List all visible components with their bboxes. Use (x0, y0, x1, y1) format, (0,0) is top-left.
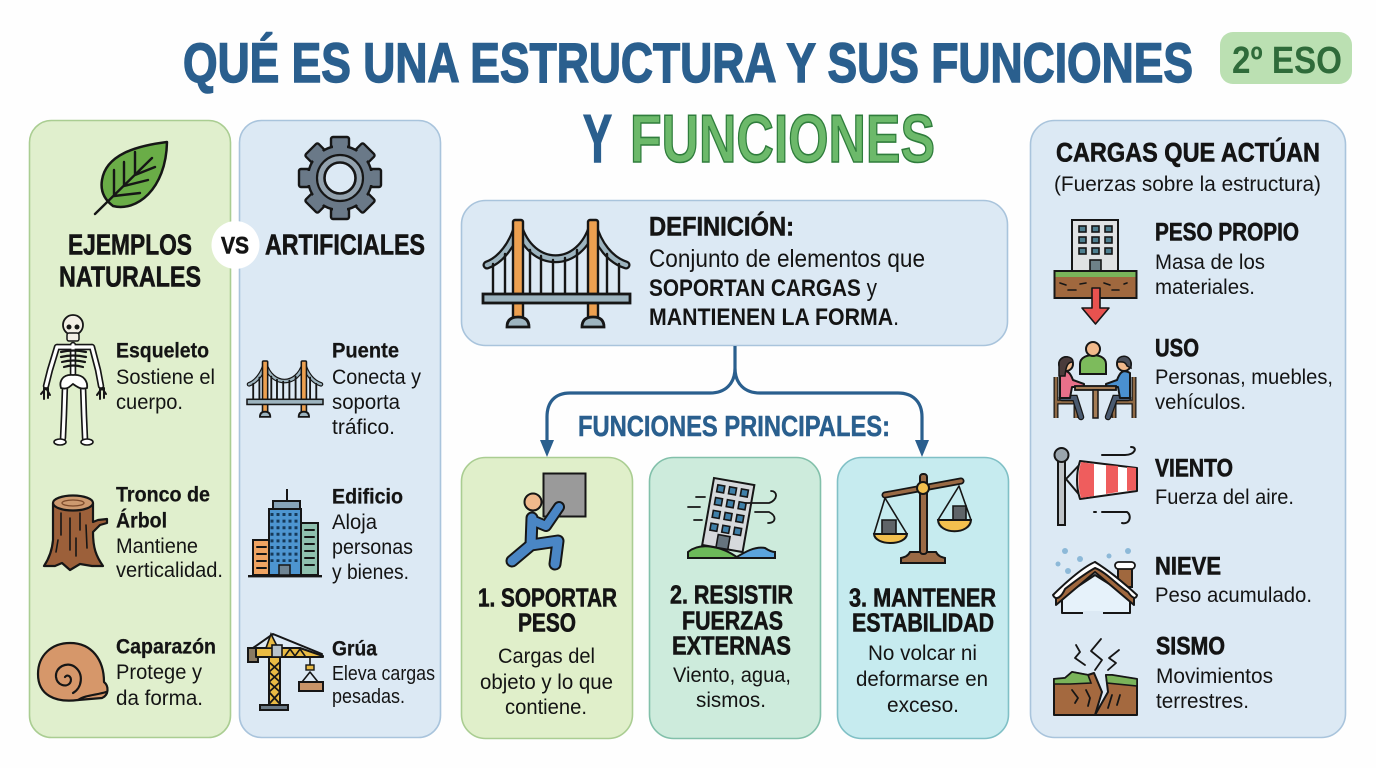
item text: puente (332, 338, 421, 439)
item text: sismo (1156, 632, 1273, 713)
icon: building weight (1054, 220, 1136, 324)
panel: mantener estabilidad (838, 458, 1008, 738)
definition text: Conjunto de elementos que (649, 245, 925, 273)
item text: grúa: pesadas. (332, 686, 405, 708)
item text: puente: Conecta y (332, 365, 421, 389)
card text: No volcar ni (868, 641, 977, 665)
panel: soportar peso (462, 458, 632, 738)
card text: Viento, agua, (673, 663, 791, 687)
item text: peso propio (1155, 218, 1299, 299)
card text: 1. SOPORTAR (478, 582, 617, 612)
item text: edificio (332, 484, 413, 584)
item text: tronco de árbol: Tronco de (116, 482, 210, 506)
item text: uso: USO (1155, 334, 1199, 362)
icon: suspension bridge (483, 220, 630, 327)
card text: objeto y lo que (480, 670, 613, 694)
item text: nieve: NIEVE (1155, 552, 1221, 580)
heading: ejemplos naturales (59, 230, 201, 294)
item text: uso: vehículos. (1155, 390, 1246, 414)
item text: esqueleto: cuerpo. (116, 390, 183, 414)
icon: earthquake (1054, 639, 1137, 715)
definition text: MANTIENEN LA FORMA. (649, 304, 899, 331)
panel: resistir fuerzas (650, 458, 820, 738)
subtitle: y funciones: FUNCIONES (630, 101, 935, 177)
card text: ESTABILIDAD (852, 608, 994, 638)
item text: caparazón: Caparazón (116, 634, 216, 658)
item text: puente: Puente (332, 338, 399, 362)
card text: PESO (518, 608, 576, 638)
icon: people at a table (1056, 342, 1134, 418)
item text: tronco de árbol: Árbol (116, 508, 167, 532)
icon: balance scale (874, 474, 971, 563)
item text: peso propio: materiales. (1155, 275, 1255, 299)
item text: viento: VIENTO (1155, 454, 1233, 482)
heading: cargas (1054, 136, 1321, 196)
item text: viento: Fuerza del aire. (1155, 485, 1294, 509)
icon: buildings (248, 489, 322, 577)
panel: ejemplos naturales (30, 120, 230, 738)
card text (670, 580, 793, 712)
card text: exceso. (887, 693, 959, 717)
definition text: SOPORTAN CARGAS y (649, 275, 877, 302)
icon: small bridge (247, 361, 323, 417)
item text: puente: soporta (332, 390, 400, 414)
panel: artificiales (240, 120, 440, 738)
heading: ejemplos naturales: EJEMPLOS (68, 230, 192, 262)
panel: cargas que actúan (1030, 120, 1346, 738)
card text: Cargas del (498, 644, 595, 668)
heading: cargas: (Fuerzas sobre la estructura) (1054, 173, 1321, 196)
subtitle: y funciones (583, 101, 935, 177)
icon: snowy house (1053, 548, 1137, 615)
icon: leaf (95, 142, 167, 214)
item text: caparazón: da forma. (116, 686, 203, 710)
item text: peso propio: PESO PROPIO (1155, 218, 1299, 246)
vs badge (212, 221, 260, 269)
item text: sismo: SISMO (1156, 632, 1225, 660)
item text: tronco de árbol: Mantiene (116, 534, 198, 558)
item text: viento (1155, 454, 1294, 509)
card text: 2. RESISTIR (670, 580, 793, 610)
item text: edificio: personas (332, 535, 413, 559)
badge: 2º ESO: 2º ESO (1232, 40, 1342, 82)
item text: edificio: Edificio (332, 484, 403, 508)
card text (478, 582, 617, 719)
item text: grúa: Grúa (332, 636, 378, 660)
heading: cargas: CARGAS QUE ACTÚAN (1056, 136, 1320, 168)
panel: definición (462, 200, 1008, 346)
icon: snail shell (38, 643, 108, 701)
card text: 3. MANTENER (849, 582, 996, 612)
item text: uso: Personas, muebles, (1155, 365, 1333, 389)
card text: deformarse en (856, 667, 988, 691)
arrow: definition to functions (540, 346, 929, 457)
item text: nieve: Peso acumulado. (1155, 583, 1312, 607)
item text: sismo: terrestres. (1156, 689, 1249, 713)
item text: esqueleto: Sostiene el (116, 365, 215, 389)
item text: tronco de árbol: verticalidad. (116, 558, 223, 582)
icon: windsock (1054, 447, 1137, 525)
item text: esqueleto: Esqueleto (116, 338, 209, 362)
item text: sismo: Movimientos (1156, 664, 1273, 688)
item text: grúa (332, 636, 435, 708)
item text: esqueleto (116, 338, 215, 414)
icon: building in wind (688, 478, 776, 558)
item text: nieve (1155, 552, 1312, 607)
definition text (649, 210, 925, 331)
icon: skeleton (41, 315, 106, 445)
item text: caparazón (116, 634, 216, 710)
item text: peso propio: Masa de los (1155, 250, 1265, 274)
item text: grúa: Eleva cargas (332, 663, 435, 685)
item text: edificio: y bienes. (332, 560, 409, 584)
item text: edificio: Aloja (332, 510, 377, 534)
definition text: DEFINICIÓN: (649, 210, 794, 242)
card text: EXTERNAS (672, 630, 791, 660)
icon: crane (248, 634, 323, 710)
vs badge: VS (221, 232, 249, 260)
icon: gear (299, 137, 381, 219)
card text: FUERZAS (682, 606, 783, 636)
heading: ejemplos naturales: NATURALES (59, 262, 201, 294)
item text: puente: tráfico. (332, 415, 395, 439)
item text: caparazón: Protege y (116, 660, 202, 684)
icon: tree trunk (44, 496, 107, 570)
icon: person lifting box (512, 474, 586, 564)
heading: artificiales: ARTIFICIALES (265, 230, 425, 262)
item text: tronco de árbol (116, 482, 223, 582)
card text (849, 582, 996, 717)
subtitle: y funciones: Y (583, 101, 612, 177)
card text: contiene. (505, 695, 587, 719)
item text: uso (1155, 334, 1333, 414)
card text: sismos. (696, 688, 766, 712)
heading: funciones principales: FUNCIONES PRINCIPALES: (578, 411, 890, 443)
